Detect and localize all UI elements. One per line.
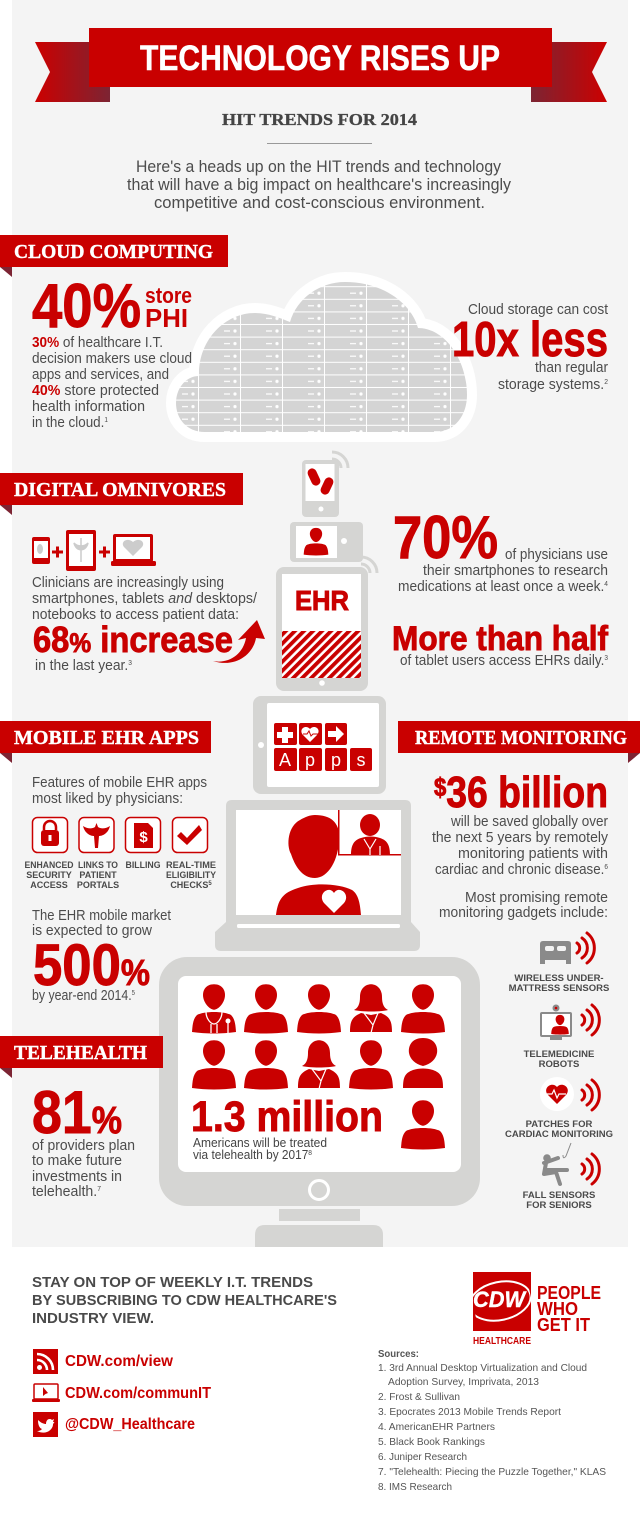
digital omnivores text: Clinicians are increasingly using [32, 575, 224, 591]
device: apps tablet: s [356, 750, 366, 770]
digital omnivores text [32, 575, 258, 623]
device: phone with pills [302, 452, 348, 517]
label: patches: PATCHES FOR [526, 1119, 592, 1130]
sources list [378, 1348, 606, 1493]
mobile apps intro text [32, 775, 207, 807]
icon: checkmark [172, 818, 208, 852]
cloud adoption text: 40% store protected [32, 383, 159, 399]
cloud adoption text: decision makers use cloud [32, 351, 192, 367]
label: wireless sensors: MATTRESS SENSORS [509, 983, 609, 994]
section banner: digital omnivores: DIGITAL OMNIVORES [14, 479, 226, 501]
stat: more than half: 3 [604, 655, 608, 662]
CDW logo: GET IT [537, 1315, 590, 1335]
icon: telemedicine robot [540, 1004, 599, 1040]
stat: 70 percent: their smartphones to research [423, 563, 608, 579]
section banner: remote monitoring: REMOTE MONITORING [415, 727, 627, 749]
icon: bed sensor [540, 933, 594, 964]
CDW logo [466, 1272, 601, 1347]
sources list: 1. 3rd Annual Desktop Virtualization and Cloud [378, 1362, 587, 1374]
device: apps tablet: p [331, 750, 341, 770]
stat: 1.3 million: 8 [308, 1150, 312, 1157]
footer call to action [32, 1274, 337, 1327]
link: RSS [33, 1349, 174, 1374]
feature labels: 5 [208, 881, 212, 887]
icon: security lock [32, 818, 68, 852]
stat: 81 percent: 7 [97, 1186, 101, 1193]
icon: billing [126, 818, 160, 852]
stat: 70 percent: 4 [604, 581, 608, 588]
intro text: competitive and cost-conscious environment. [154, 193, 485, 212]
section banner: mobile EHR apps: MOBILE EHR APPS [14, 727, 199, 749]
stat: 70 percent: medications at least once a week. [398, 579, 616, 595]
title: TECHNOLOGY RISES UP [140, 39, 500, 78]
sources list: Sources: [378, 1348, 419, 1360]
CDW logo: CDW [473, 1287, 527, 1312]
link: twitter: @CDW_Healthcare [65, 1416, 195, 1433]
stat: 40 percent store PHI: PHI [145, 303, 188, 333]
device: apps tablet: p [305, 750, 315, 770]
device: desktop monitor [159, 957, 480, 1247]
device: apps tablet [253, 696, 386, 794]
stat: 81 percent: 81% [32, 1079, 122, 1146]
intro text [127, 157, 511, 212]
intro text: that will have a big impact on healthcare's increasingly [127, 175, 511, 194]
stat: 36 billion: monitoring gadgets include: [439, 905, 608, 921]
stat: 36 billion: Most promising remote [465, 890, 608, 906]
footer call to action: STAY ON TOP OF WEEKLY I.T. TRENDS [32, 1274, 313, 1291]
sources list: 6. Juniper Research [378, 1451, 467, 1463]
feature labels: PATIENT [79, 870, 117, 880]
stat: 81 percent: investments in [32, 1169, 122, 1185]
label: fall sensors: FALL SENSORS [523, 1190, 595, 1201]
stat: 40 percent store PHI: 40% [32, 272, 141, 341]
feature labels: ELIGIBILITY [166, 870, 216, 880]
digital omnivores text: smartphones, tablets and desktops/ [32, 591, 258, 607]
cloud adoption text: health information [32, 399, 145, 415]
CDW logo: HEALTHCARE [473, 1335, 531, 1347]
stat: 81 percent: of providers plan [32, 1138, 135, 1154]
section banner: telehealth [0, 1036, 163, 1078]
arrow: rising [213, 620, 265, 663]
label: telemedicine: TELEMEDICINE [524, 1049, 594, 1060]
device: apps tablet: A [279, 750, 291, 770]
label: wireless sensors: WIRELESS UNDER- [514, 973, 604, 984]
stat: 1.3 million: via telehealth by 2017 [193, 1148, 315, 1162]
stat: 36 billion: 36 billion [446, 768, 608, 817]
feature labels: ACCESS [30, 880, 68, 890]
stat: more than half: of tablet users access EHRs daily. [400, 653, 619, 669]
feature labels: SECURITY [26, 870, 72, 880]
sources list: 3. Epocrates 2013 Mobile Trends Report [378, 1406, 561, 1418]
feature labels [24, 860, 216, 890]
title ribbon [35, 28, 607, 102]
sources list: 4. AmericanEHR Partners [378, 1421, 495, 1433]
last year text: 3 [128, 660, 132, 667]
link: communIT: CDW.com/communIT [65, 1385, 211, 1402]
stat: 36 billion: monitoring patients with [458, 846, 608, 862]
stat: 81 percent: telehealth. [32, 1184, 99, 1200]
feature labels: LINKS TO [78, 860, 118, 870]
stat: 500 percent: 5 [132, 990, 135, 997]
stat: 81 percent: to make future [32, 1153, 122, 1169]
section banner: remote monitoring [398, 721, 640, 763]
icon: billing: $ [139, 829, 148, 846]
stat: 10x less: than regular [535, 360, 608, 376]
stat: 70 percent: 70% [393, 504, 498, 571]
stat: 36 billion: cardiac and chronic disease. [435, 862, 619, 878]
icon: heart patch [540, 1077, 599, 1111]
stat: 500 percent [32, 908, 171, 1004]
stat: 500 percent: The EHR mobile market [32, 908, 171, 924]
stat: 36 billion: 6 [604, 864, 608, 871]
label: telemedicine [524, 1049, 594, 1070]
sources list: 8. IMS Research [378, 1481, 452, 1493]
icon: server cloud [170, 276, 474, 436]
stat: 10x less: Cloud storage can cost [468, 302, 608, 318]
feature labels: ENHANCED [24, 860, 74, 870]
subtitle: HIT TRENDS FOR 2014 [222, 110, 418, 129]
stat: 81 percent [32, 1079, 135, 1200]
stat: 1.3 million: Americans will be treated [193, 1136, 327, 1150]
device: laptop with video call [215, 800, 420, 951]
icons: phone tablet laptop [32, 530, 156, 571]
section banner: cloud computing [0, 235, 228, 277]
stat: 500 percent: 500% [33, 933, 150, 998]
cloud adoption text: in the cloud. [32, 415, 110, 431]
link: twitter [33, 1412, 195, 1437]
icon: caduceus [79, 818, 114, 852]
label: fall sensors [523, 1190, 595, 1211]
device: EHR tablet: EHR [295, 585, 349, 616]
cloud adoption text: 1 [104, 417, 108, 424]
device: EHR tablet [276, 567, 368, 691]
stat: 10x less: storage systems. [498, 377, 608, 393]
icon: fall sensor [543, 1143, 599, 1184]
feature labels: REAL-TIME [166, 860, 216, 870]
feature labels: PORTALS [77, 880, 119, 890]
label: patches: CARDIAC MONITORING [505, 1129, 613, 1140]
sources list: 7. "Telehealth: Piecing the Puzzle Together," KLAS [378, 1466, 606, 1478]
sources list: 5. Black Book Rankings [378, 1436, 485, 1448]
stat: 40 percent store PHI: store [145, 283, 192, 308]
mobile apps intro text: most liked by physicians: [32, 791, 183, 807]
digital omnivores text: notebooks to access patient data: [32, 607, 239, 623]
label: wireless sensors [509, 973, 609, 994]
section banner: mobile EHR apps [0, 721, 211, 763]
cloud adoption text: 30% of healthcare I.T. [32, 335, 163, 351]
stat: 36 billion: the next 5 years by remotely [432, 830, 609, 846]
stat: 10x less: 10x less [452, 313, 608, 367]
label: patches [505, 1119, 613, 1140]
CDW logo: WHO [537, 1299, 578, 1319]
feature labels: BILLING [126, 860, 160, 870]
last year text: in the last year. [35, 658, 133, 674]
cloud adoption text: apps and services, and [32, 367, 169, 383]
link: RSS: CDW.com/view [65, 1353, 174, 1370]
stat: 68 percent increase: 68% increase [33, 619, 233, 660]
stat: 36 billion: will be saved globally over [450, 814, 608, 830]
sources list: 2. Frost & Sullivan [378, 1391, 460, 1403]
mobile apps intro text: Features of mobile EHR apps [32, 775, 207, 791]
label: telemedicine: ROBOTS [539, 1059, 579, 1070]
stat: 1.3 million: 1.3 million [191, 1093, 383, 1141]
stat: 10x less: 2 [604, 379, 608, 386]
footer call to action: INDUSTRY VIEW. [32, 1310, 154, 1327]
stat: 36 billion [432, 768, 609, 921]
stat: 70 percent [393, 504, 608, 595]
intro text: Here's a heads up on the HIT trends and technology [136, 157, 501, 176]
CDW logo: PEOPLE [537, 1283, 601, 1303]
patient icon grid [192, 984, 445, 1150]
stat: more than half: More than half [392, 620, 609, 658]
section banner: cloud computing: CLOUD COMPUTING [14, 241, 213, 263]
stat: 1.3 million [191, 1093, 383, 1162]
footer call to action: BY SUBSCRIBING TO CDW HEALTHCARE'S [32, 1292, 337, 1309]
stat: 70 percent: of physicians use [505, 547, 608, 563]
stat: 36 billion: $ [434, 772, 447, 802]
stat: 500 percent: by year-end 2014. [32, 988, 149, 1004]
sources list: Adoption Survey, Imprivata, 2013 [388, 1376, 539, 1388]
stat: 10x less [452, 302, 608, 393]
device: landscape phone with doctor [290, 522, 377, 573]
label: fall sensors: FOR SENIORS [526, 1200, 592, 1211]
feature labels: CHECKS [170, 880, 208, 890]
cloud adoption text [32, 335, 192, 431]
section banner: digital omnivores [0, 473, 243, 515]
section banner: telehealth: TELEHEALTH [14, 1042, 147, 1064]
stat: 500 percent: is expected to grow [32, 923, 152, 939]
background panel [12, 0, 628, 1247]
